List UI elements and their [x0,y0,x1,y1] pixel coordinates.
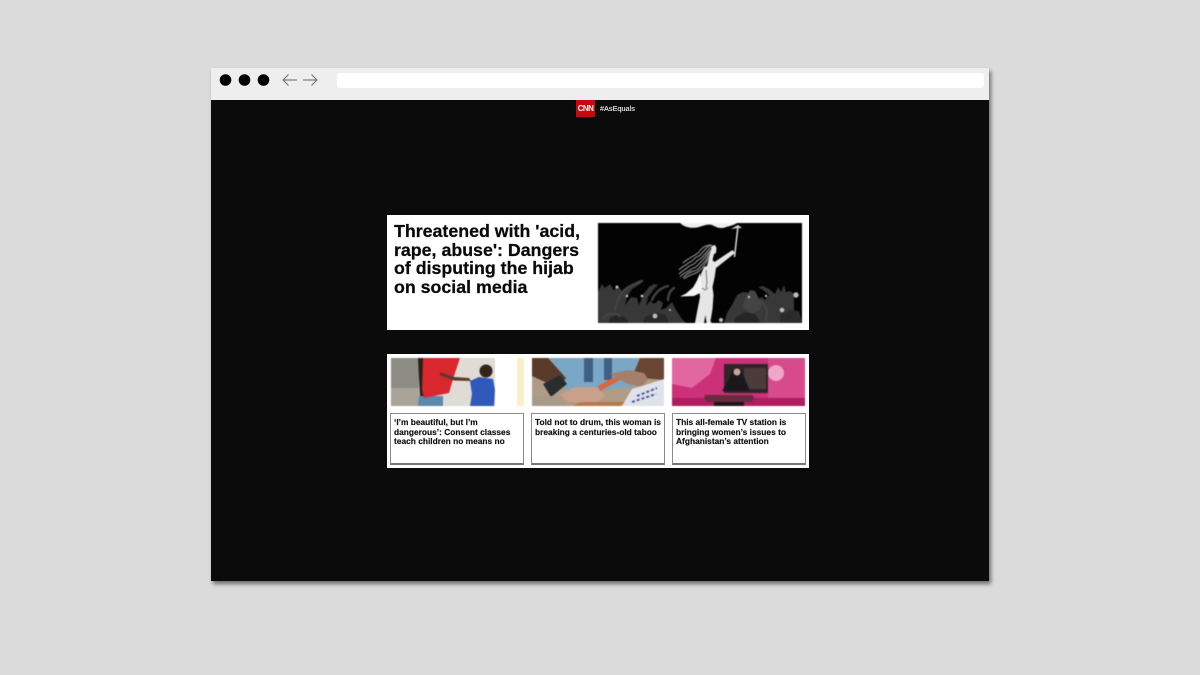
caption: consent classes: teach children no means no [394,436,505,446]
caption: TV station: bringing women’s issues to [676,427,786,437]
illustration: woman with flag above crowd [597,222,803,324]
headline: on social media [394,277,527,297]
woman's hair [679,245,713,279]
creature arms [604,281,767,320]
woman's figure [695,245,735,323]
caption: TV station: Afghanistan’s attention [676,436,769,446]
flag [680,223,737,228]
caption: drumming taboo: Told not to drum, this woman is [535,417,661,427]
headline [394,221,580,297]
clothing lines [702,270,708,290]
headline: Threatened with 'acid, [394,221,580,241]
caption: TV station [672,413,806,465]
headline: of disputing the hijab [394,258,574,278]
caption: TV station: This all-female TV station is [676,417,786,427]
creature eyes [616,286,799,322]
address bar [337,73,984,88]
caption: consent classes [390,413,524,465]
panel: featured story [387,215,809,330]
flagpole [734,226,738,257]
hashtag label: #AsEquals [600,104,635,113]
photo: TV studio presenter [671,357,806,407]
crowd of creatures [598,280,802,331]
caption: drumming taboo: breaking a centuries-old taboo [535,427,657,437]
woman's cape [680,273,702,296]
caption: consent classes: dangerous’: Consent classes [394,427,510,437]
caption: consent classes: ‘I’m beautiful, but I’m [394,417,478,427]
window control dots [220,74,270,86]
browser toolbar [211,68,989,100]
browser window [211,68,989,581]
photo: hands on a drum [531,357,665,407]
photo: child punching red pad [390,357,524,407]
page content area [211,100,989,581]
headline: rape, abuse': Dangers [394,240,579,260]
icon: back and forward arrows [282,74,318,86]
CNN logo: CNN [578,104,593,113]
panel: related stories [387,354,809,468]
caption: drumming taboo [531,413,665,465]
CNN logo [576,100,595,117]
CNN header [576,100,635,117]
